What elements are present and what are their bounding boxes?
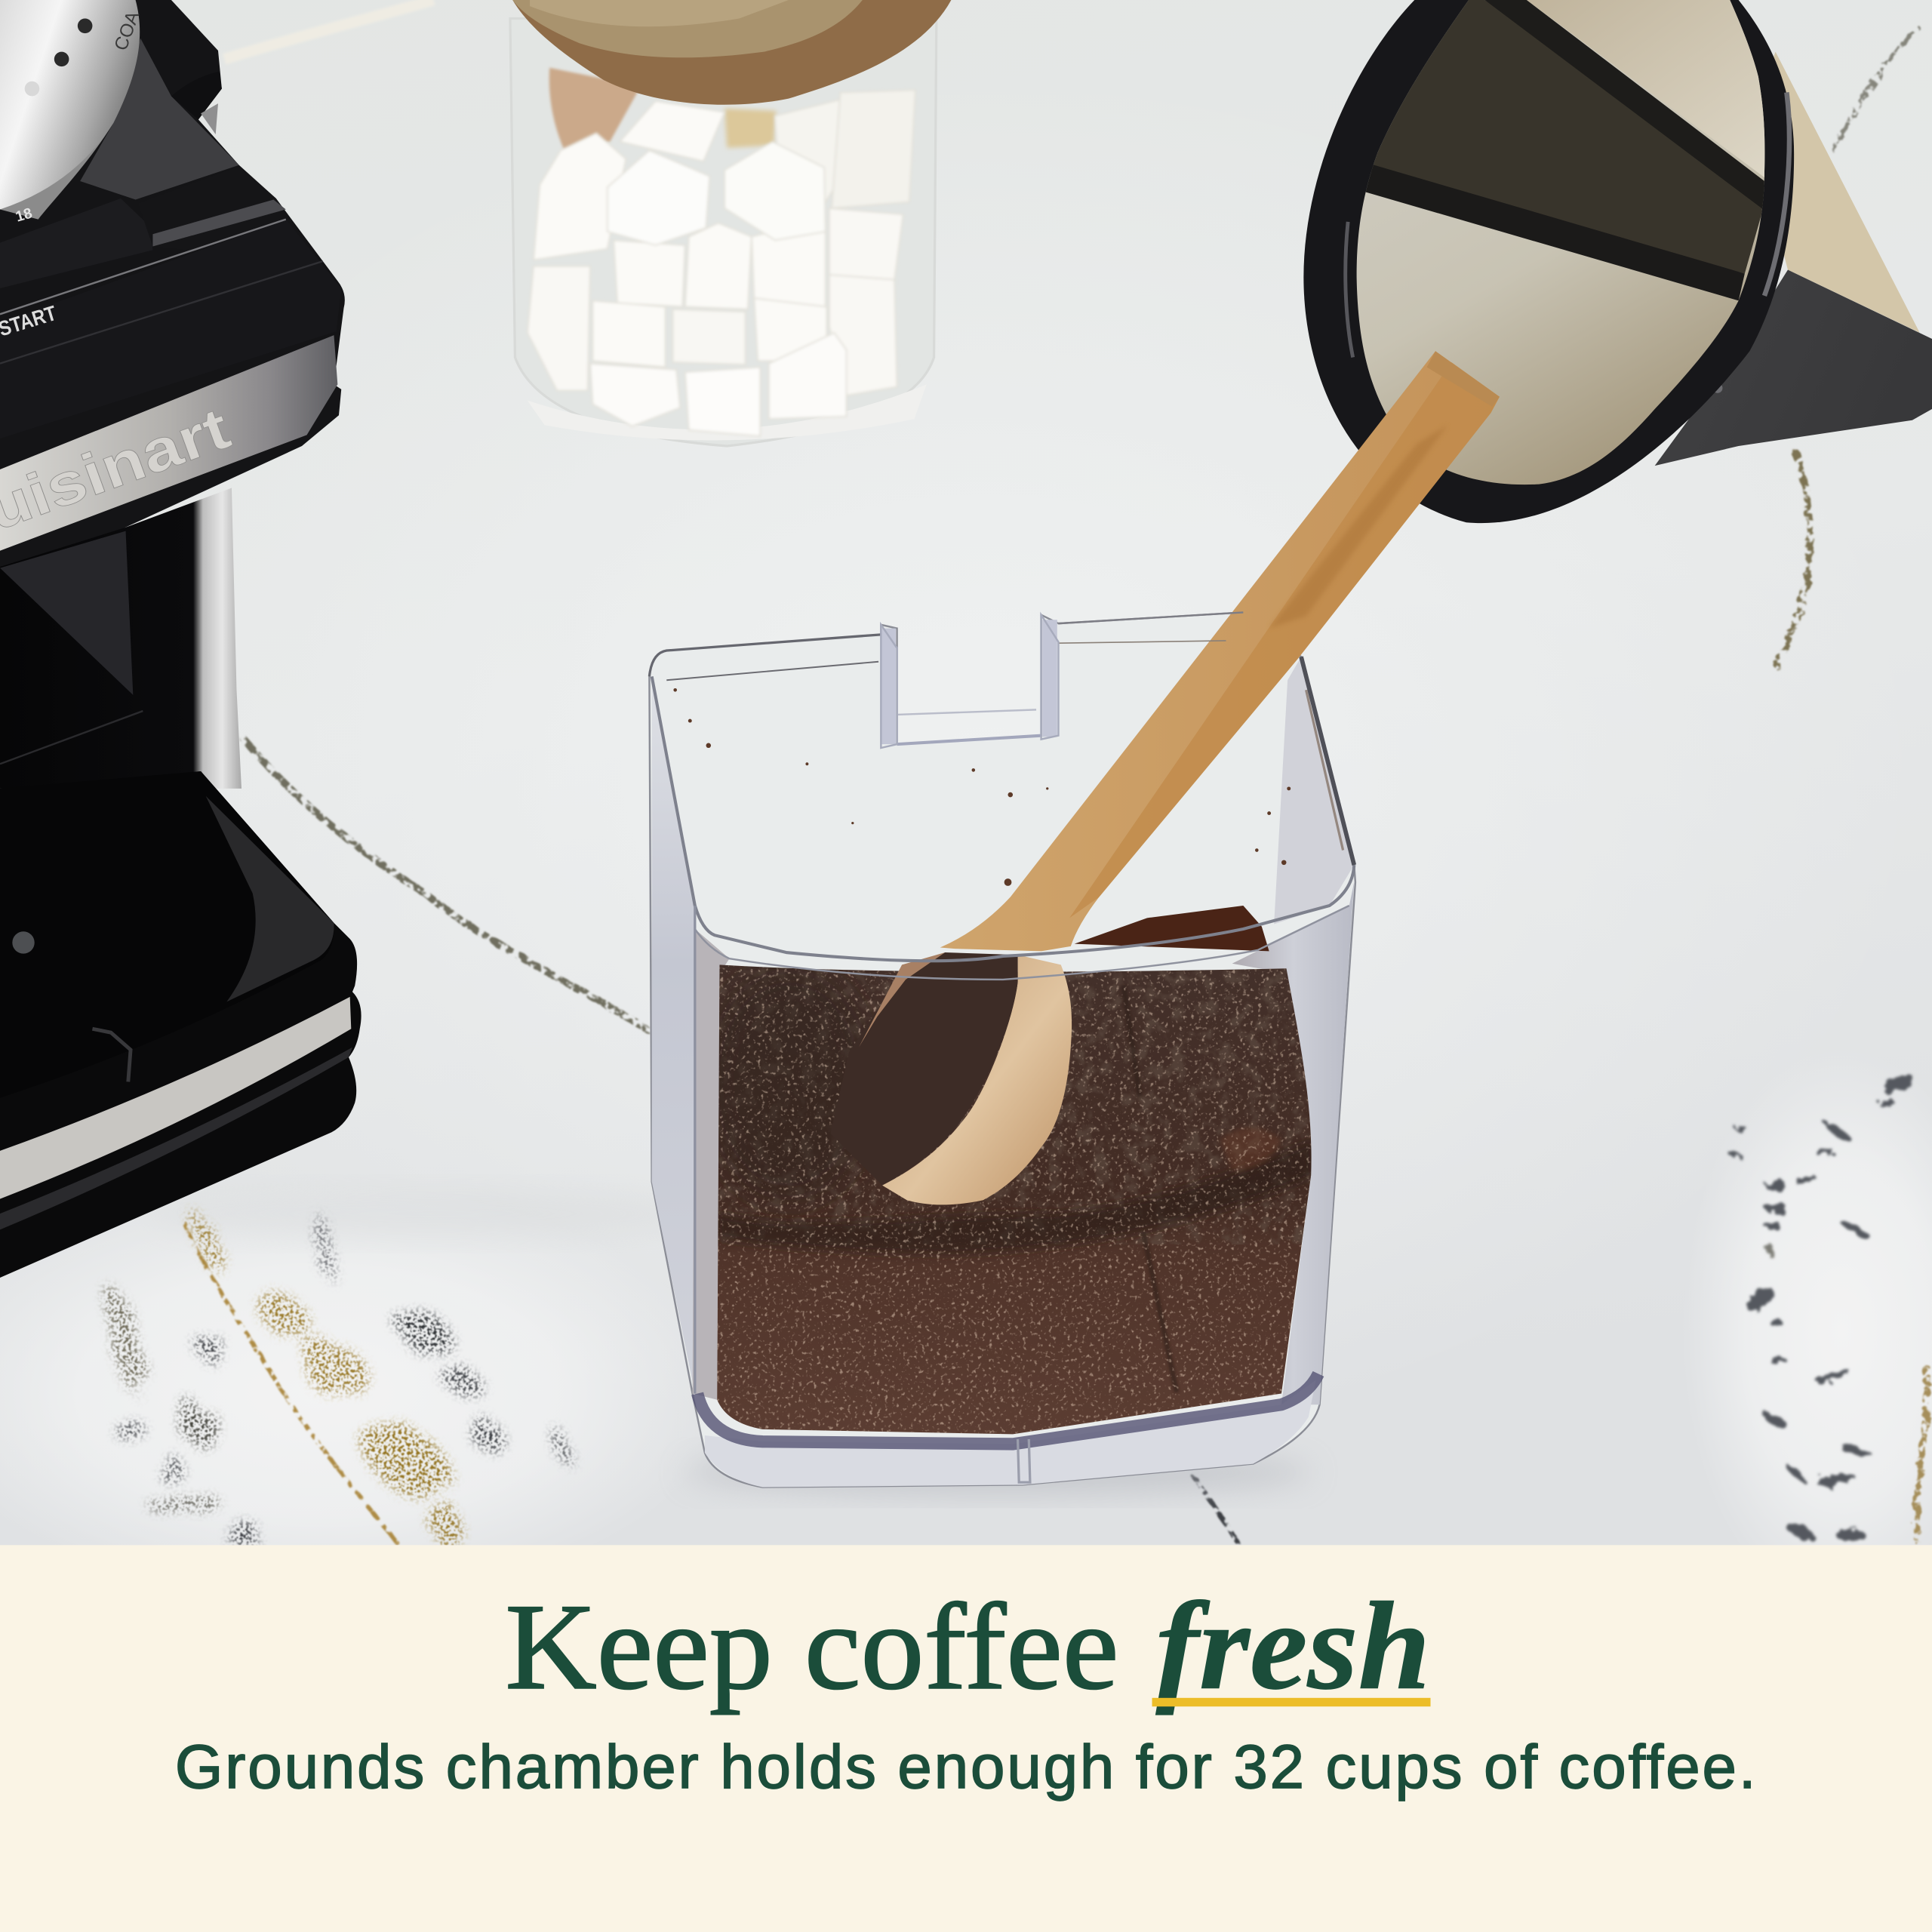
pile of grounds above lip: [1075, 906, 1269, 951]
grounds container: [649, 351, 1500, 1487]
right glass strip: [1232, 882, 1354, 1404]
left glass side panel: [652, 676, 695, 1394]
left glass strip: [693, 929, 730, 1400]
drip plate base: [0, 771, 361, 1278]
subheading: Grounds chamber holds enough for 32 cups of coffee.: [175, 1733, 1756, 1801]
spoon handle: [940, 351, 1500, 951]
stray grounds on wall: [673, 688, 1291, 886]
top control strips: [0, 166, 341, 438]
container front glass: [649, 612, 1354, 1482]
filter rim: [1303, 0, 1794, 523]
coffee grounds: [717, 964, 1312, 1434]
speckled gold and grey marble clusters: [103, 1208, 574, 1548]
burr hopper dial: [0, 0, 144, 220]
spoon bowl: [882, 955, 1072, 1204]
soft shadow of container: [684, 1451, 1312, 1494]
container back wall: [649, 612, 1355, 1487]
dial number: 18: [14, 205, 34, 226]
steel strip: [0, 997, 351, 1199]
filter cone exterior: [1655, 52, 1932, 466]
jar lid knob shadow: [549, 68, 641, 150]
black reservoir post: [0, 488, 242, 789]
burr hopper dial: COA: [111, 8, 144, 54]
gold mesh coffee filter: [1303, 0, 1932, 523]
heading: fresh: [1155, 1577, 1431, 1716]
marble veins: [185, 27, 1927, 1544]
filter mesh interior: [1343, 0, 1774, 493]
power cord: [224, 0, 434, 59]
wooden spoon: [830, 351, 1500, 1204]
wooden jar lid: [512, 0, 951, 105]
glass base: [705, 1380, 1316, 1487]
right side dark marble flecks: [1730, 1070, 1916, 1544]
heading: [505, 1577, 1431, 1716]
caption banner: [0, 1545, 1932, 1932]
plate top: [0, 771, 334, 1098]
steel brand band: [0, 335, 337, 551]
sugar cubes: [528, 90, 915, 436]
right glass inner wall: [1274, 657, 1354, 924]
heading underline: [1152, 1698, 1431, 1706]
sugar jar: [510, 0, 951, 446]
heading: Keep coffee: [505, 1580, 1118, 1715]
base silhouette: [0, 771, 361, 1278]
coffee grinder: [0, 0, 361, 1278]
grinder body shell: [0, 0, 345, 586]
lower black rim: [0, 1048, 352, 1229]
